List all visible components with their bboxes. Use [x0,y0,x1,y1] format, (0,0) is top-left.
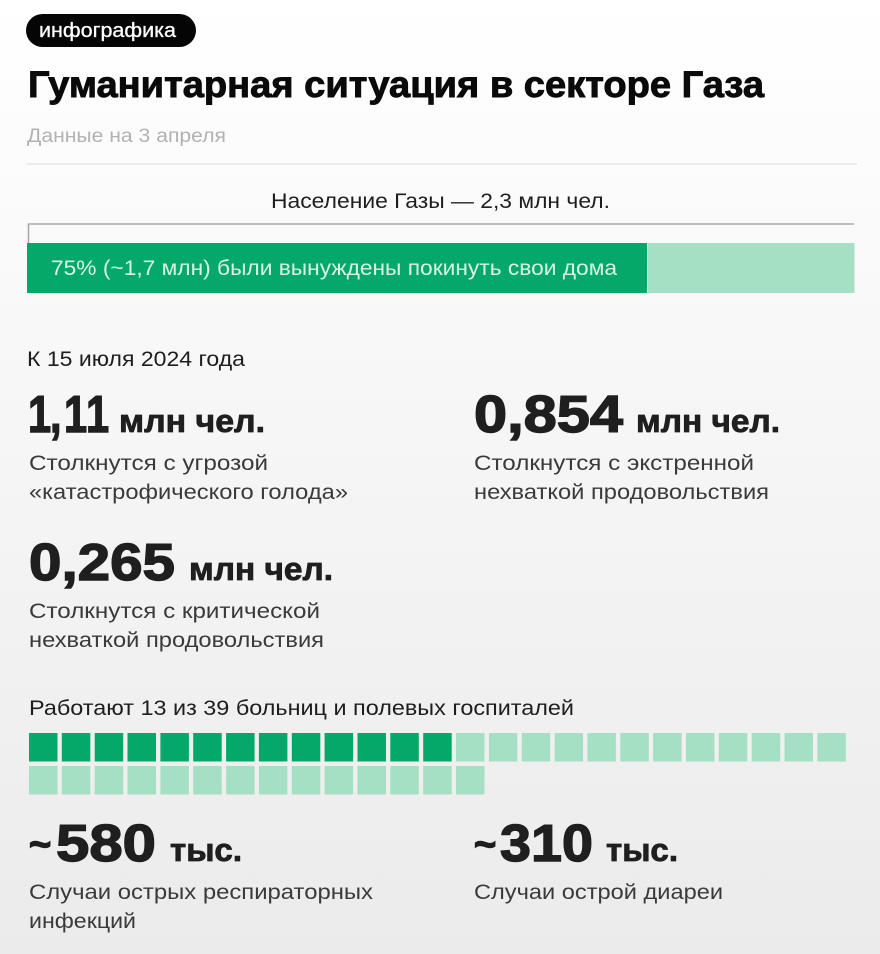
panel: population bar [27,190,854,293]
stat: 0,854 млн [474,386,780,504]
heading: hospitals: Работают 13 из 39 больниц и полевых госпиталей [29,697,574,720]
stat: 1,11 млн: 1,11 [28,385,109,443]
bracket [28,224,854,243]
stat: ~310 тыс. [474,815,723,904]
stat: 0,265 млн: нехваткой продовольствия [29,629,324,652]
population label: Население Газы — 2,3 млн чел. [271,190,610,213]
stat: 1,11 млн: млн чел. [119,403,265,439]
stat: ~310 тыс.: тыс. [606,832,678,868]
stat: ~310 тыс.: 310 [500,815,593,873]
stat: ~580 тыс.: 580 [56,815,156,873]
tag: инфографика: инфографика [39,20,177,42]
subtitle: date: Данные на 3 апреля [27,126,226,147]
stat: 0,854 млн: млн чел. [636,403,780,439]
stat: ~310 тыс.: ~ [474,824,496,866]
stat: ~580 тыс. [29,815,374,933]
stat: ~580 тыс.: ~ [29,824,51,866]
stat: 1,11 млн: Столкнутся с угрозой [29,452,268,475]
stat: 1,11 млн: «катастрофического голода» [29,481,348,504]
stat: 0,265 млн: млн чел. [189,551,333,587]
stat: 0,854 млн: нехваткой продовольствия [474,481,769,504]
stat: 0,854 млн: Столкнутся с экстренной [474,452,754,475]
stat: 1,11 млн [28,385,348,504]
stat: ~310 тыс.: Случаи острой диареи [474,881,723,904]
stat: ~580 тыс.: инфекций [29,910,136,933]
stat: 0,265 млн [29,534,333,652]
stat: ~580 тыс.: тыс. [170,832,242,868]
stat: ~580 тыс.: Случаи острых респираторных [29,881,374,904]
tag: инфографика [26,14,196,47]
stat: 0,265 млн: 0,265 [29,534,175,592]
bar label: 75% (~1,7 млн) были вынуждены покинуть свои дома [51,257,617,280]
stat: 0,854 млн: 0,854 [474,386,623,444]
chart: hospital squares [29,733,846,794]
heading: forecast date: К 15 июля 2024 года [27,348,245,371]
remaining share bar [648,243,854,293]
stat: 0,265 млн: Столкнутся с критической [29,600,320,623]
title: Гуманитарная ситуация в секторе Газа [28,64,764,105]
displaced share bar [27,243,647,293]
